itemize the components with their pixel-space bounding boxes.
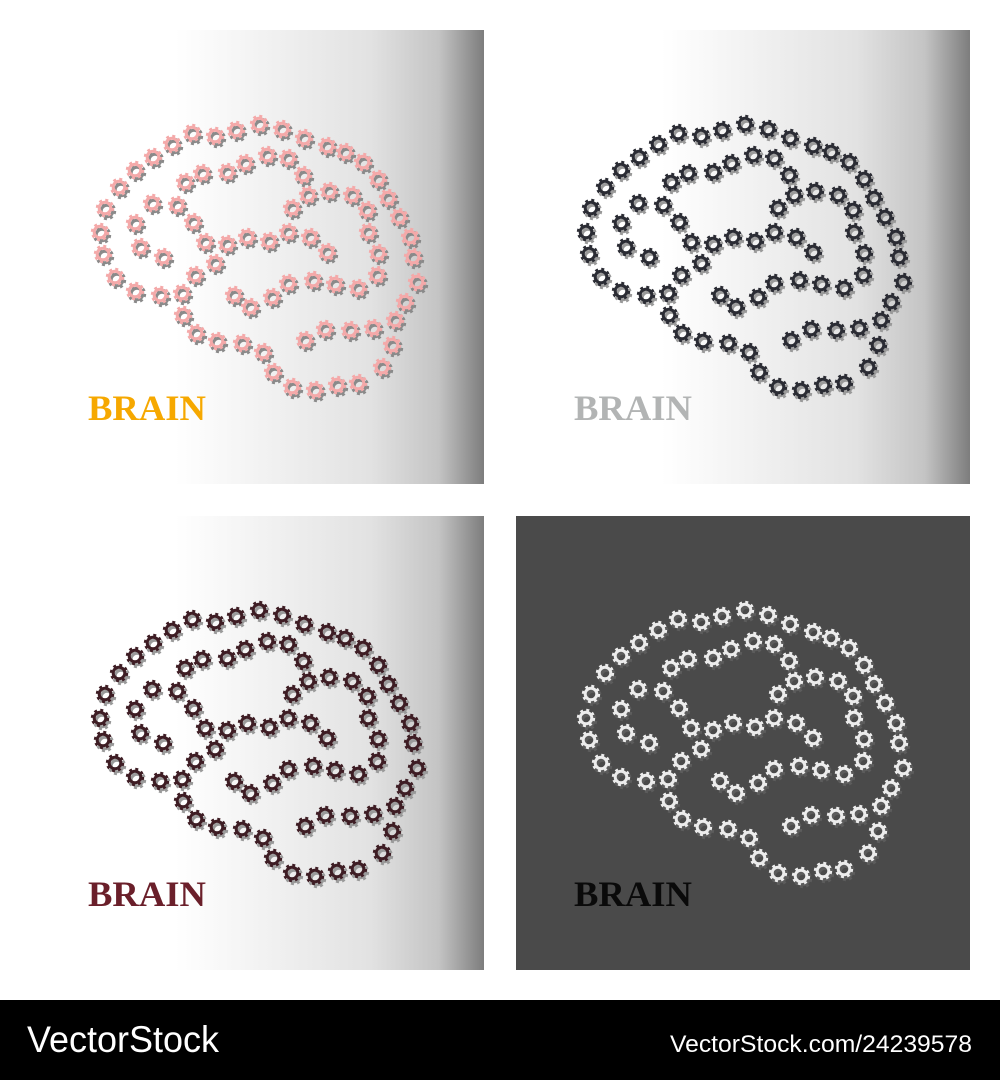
label: orange BRAIN: BRAIN	[88, 388, 206, 428]
panel: dark gray brain	[516, 30, 970, 484]
panel: pink brain	[30, 30, 484, 484]
label: black BRAIN: BRAIN	[574, 874, 692, 914]
icon: pink gear brain	[92, 116, 427, 401]
panel: dark background brain	[516, 516, 970, 970]
icon: light gear brain	[578, 602, 913, 887]
icon: dark gear brain	[578, 116, 913, 401]
icon: maroon gear brain	[92, 602, 427, 887]
footer: VectorStock logo: VectorStock	[27, 1019, 219, 1060]
label: gray BRAIN: BRAIN	[574, 388, 692, 428]
panel: maroon brain	[30, 516, 484, 970]
footer: image URL: VectorStock.com/24239578	[670, 1031, 972, 1058]
footer bar	[0, 1000, 1000, 1080]
label: maroon BRAIN: BRAIN	[88, 874, 206, 914]
